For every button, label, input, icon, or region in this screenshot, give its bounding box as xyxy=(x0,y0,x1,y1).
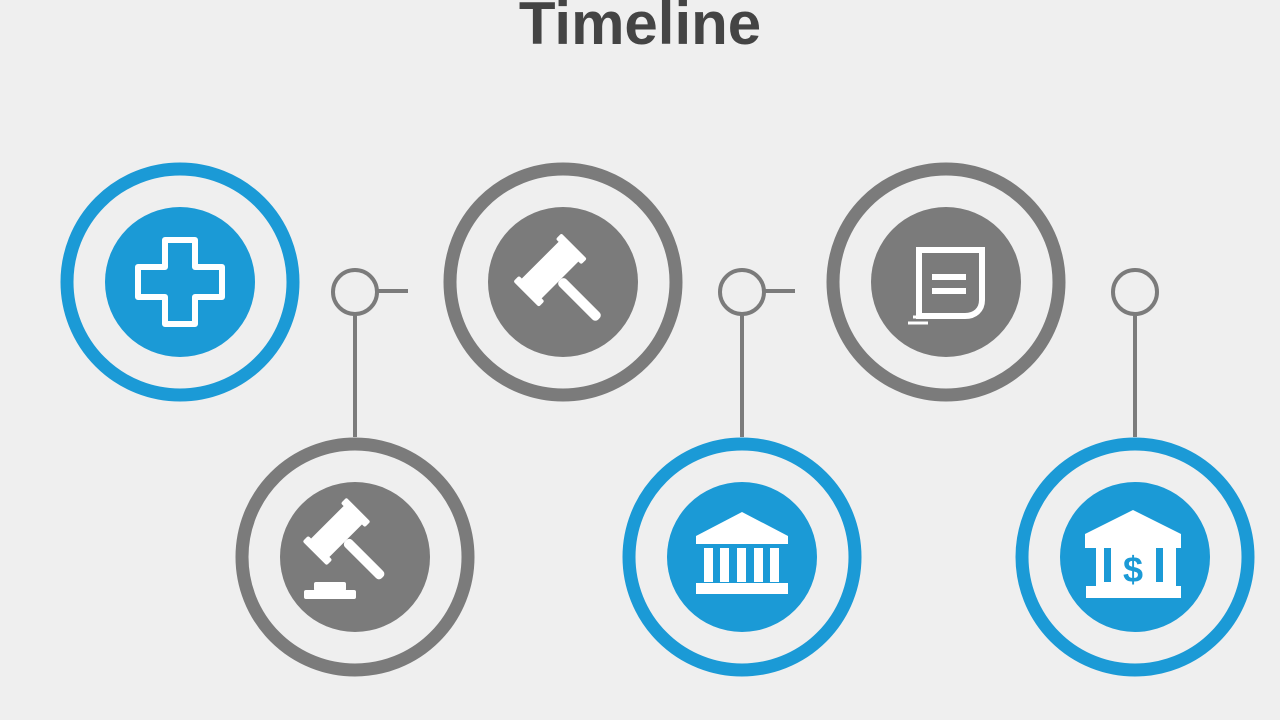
milestone 1: medical xyxy=(67,169,293,395)
milestone 3: document xyxy=(833,169,1059,395)
connector 3 xyxy=(1113,270,1157,437)
milestone 6: bank with dollar: $ xyxy=(1123,549,1143,590)
connector 1 xyxy=(333,270,408,437)
icon: bank dollar xyxy=(1085,510,1181,598)
connector 2 xyxy=(720,270,795,437)
icon: gavel xyxy=(513,233,623,343)
icon: bank xyxy=(696,512,788,594)
milestone 6: bank with dollar xyxy=(1022,444,1248,670)
milestone 5: bank xyxy=(629,444,855,670)
icon: gavel and block xyxy=(303,498,404,599)
milestone 2: gavel xyxy=(450,169,676,395)
milestone 4: gavel with base xyxy=(242,444,468,670)
icon: cross xyxy=(138,240,222,324)
icon: document xyxy=(919,250,982,316)
